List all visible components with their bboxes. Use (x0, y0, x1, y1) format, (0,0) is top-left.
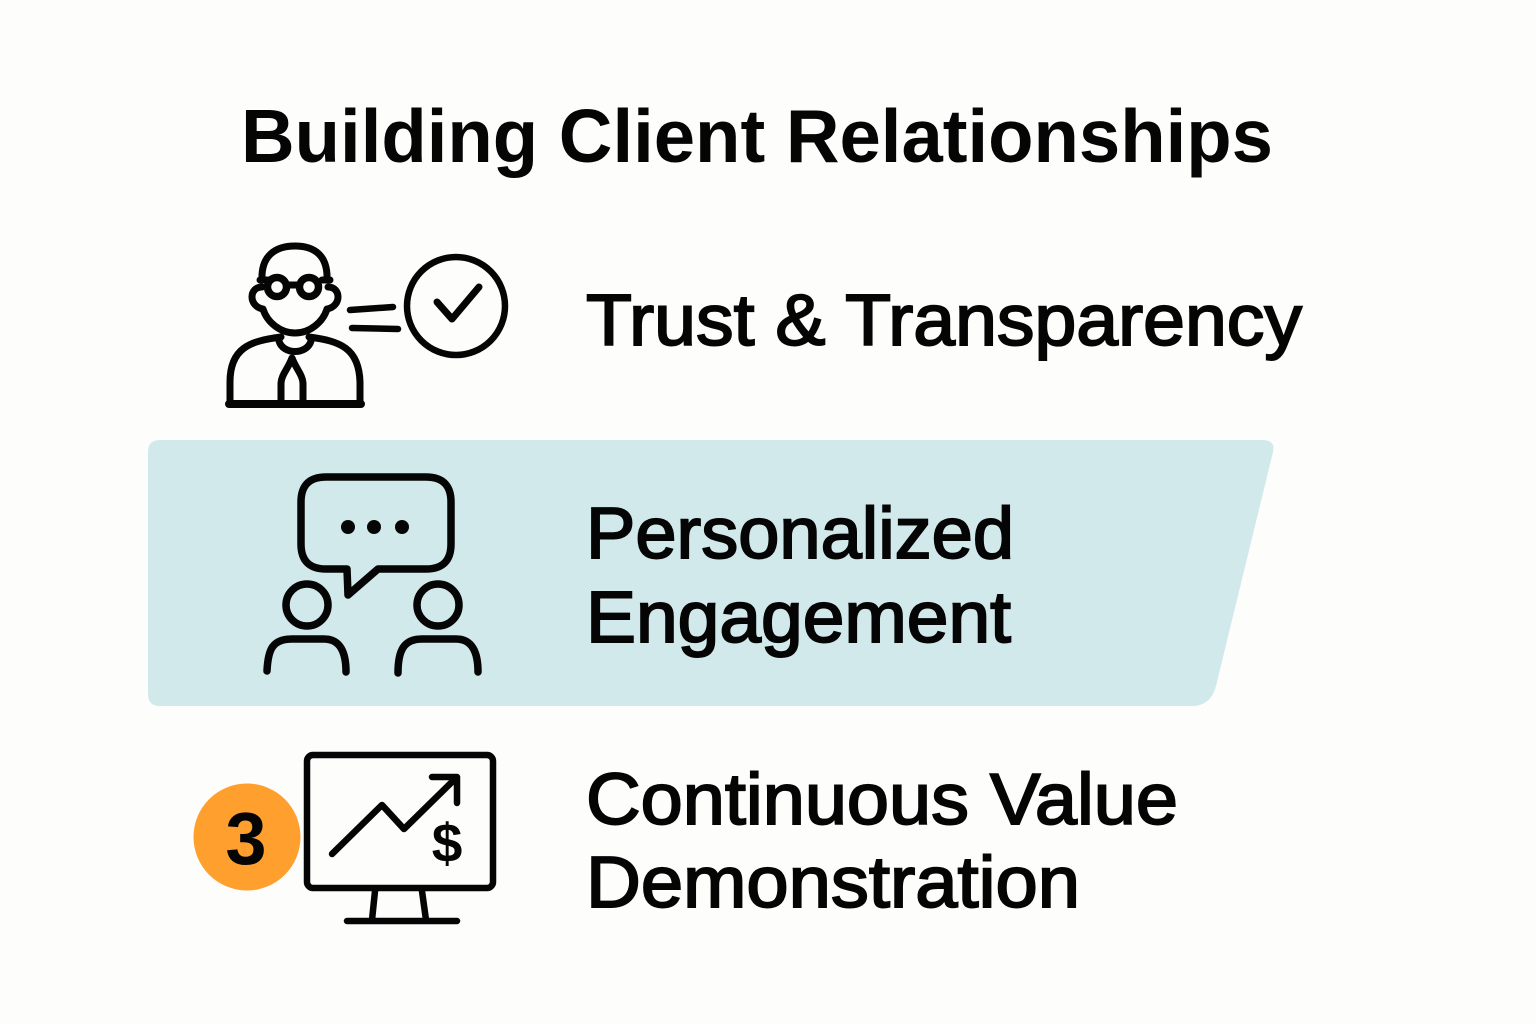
text: continuous value demonstration: Continuous Value (586, 760, 1178, 840)
text: continuous value demonstration: Demonstration (586, 843, 1080, 923)
number badge: 3 (194, 784, 300, 890)
text: personalized engagement: Personalized (586, 494, 1014, 574)
text: trust and transparency: Trust & Transparency (586, 281, 1302, 361)
text: personalized engagement (586, 494, 1014, 658)
text: personalized engagement: Engagement (586, 578, 1011, 658)
icon: person with checkmark (229, 246, 505, 404)
icon: monitor with rising chart (307, 755, 493, 921)
icon: monitor with rising chart: $ (432, 812, 462, 874)
text: continuous value demonstration (586, 760, 1178, 923)
icon: two people in conversation (267, 477, 478, 673)
number badge: 3: 3 (225, 797, 267, 880)
panel: personalized engagement (148, 440, 1274, 706)
title: Building Client Relationships (241, 94, 1273, 178)
